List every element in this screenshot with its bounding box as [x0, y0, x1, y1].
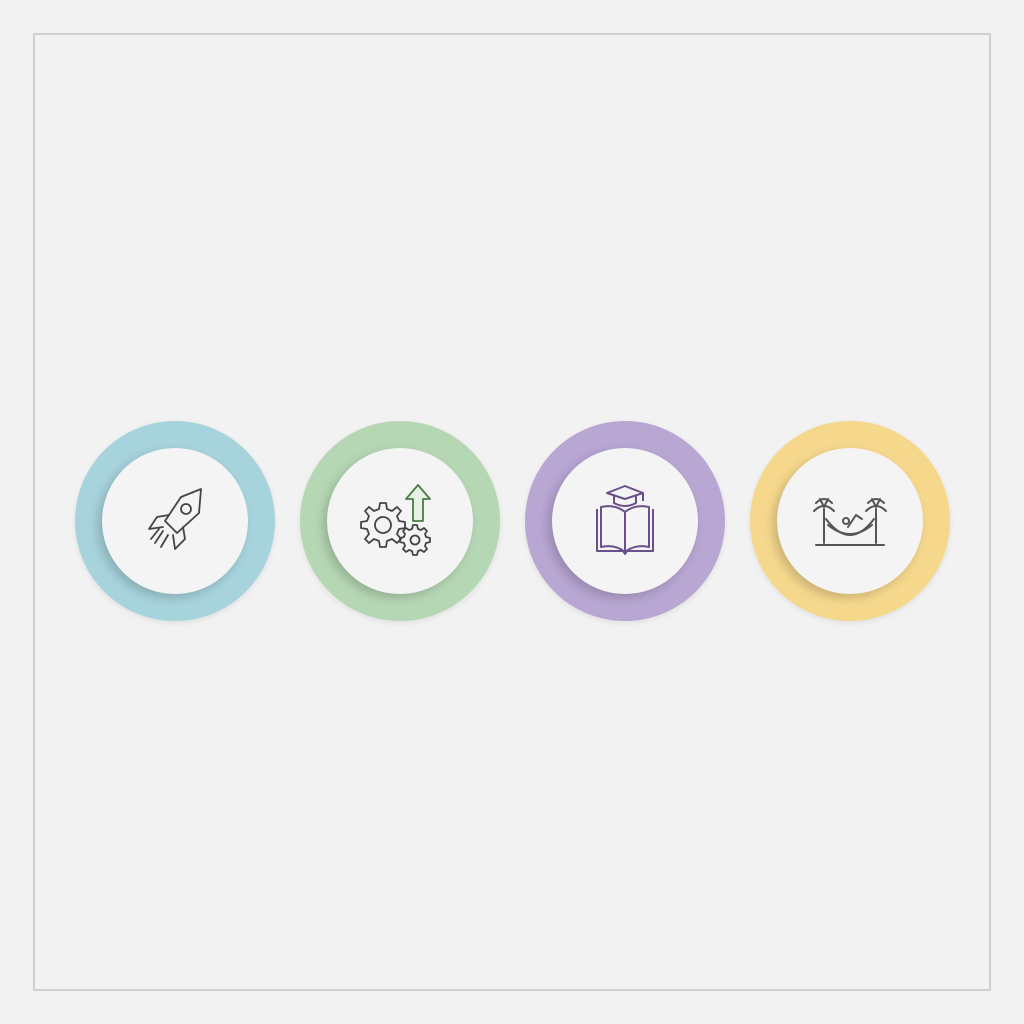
circle: education (purple)	[525, 421, 725, 621]
icon: rocket	[148, 488, 202, 550]
icon: book with cap	[596, 485, 654, 555]
icon: hammock between palms	[813, 498, 887, 546]
icon: gears with arrow	[360, 484, 431, 556]
circle: gears growth (green)	[300, 421, 500, 621]
circle: hammock (yellow)	[750, 421, 950, 621]
circle: rocket (blue)	[75, 421, 275, 621]
